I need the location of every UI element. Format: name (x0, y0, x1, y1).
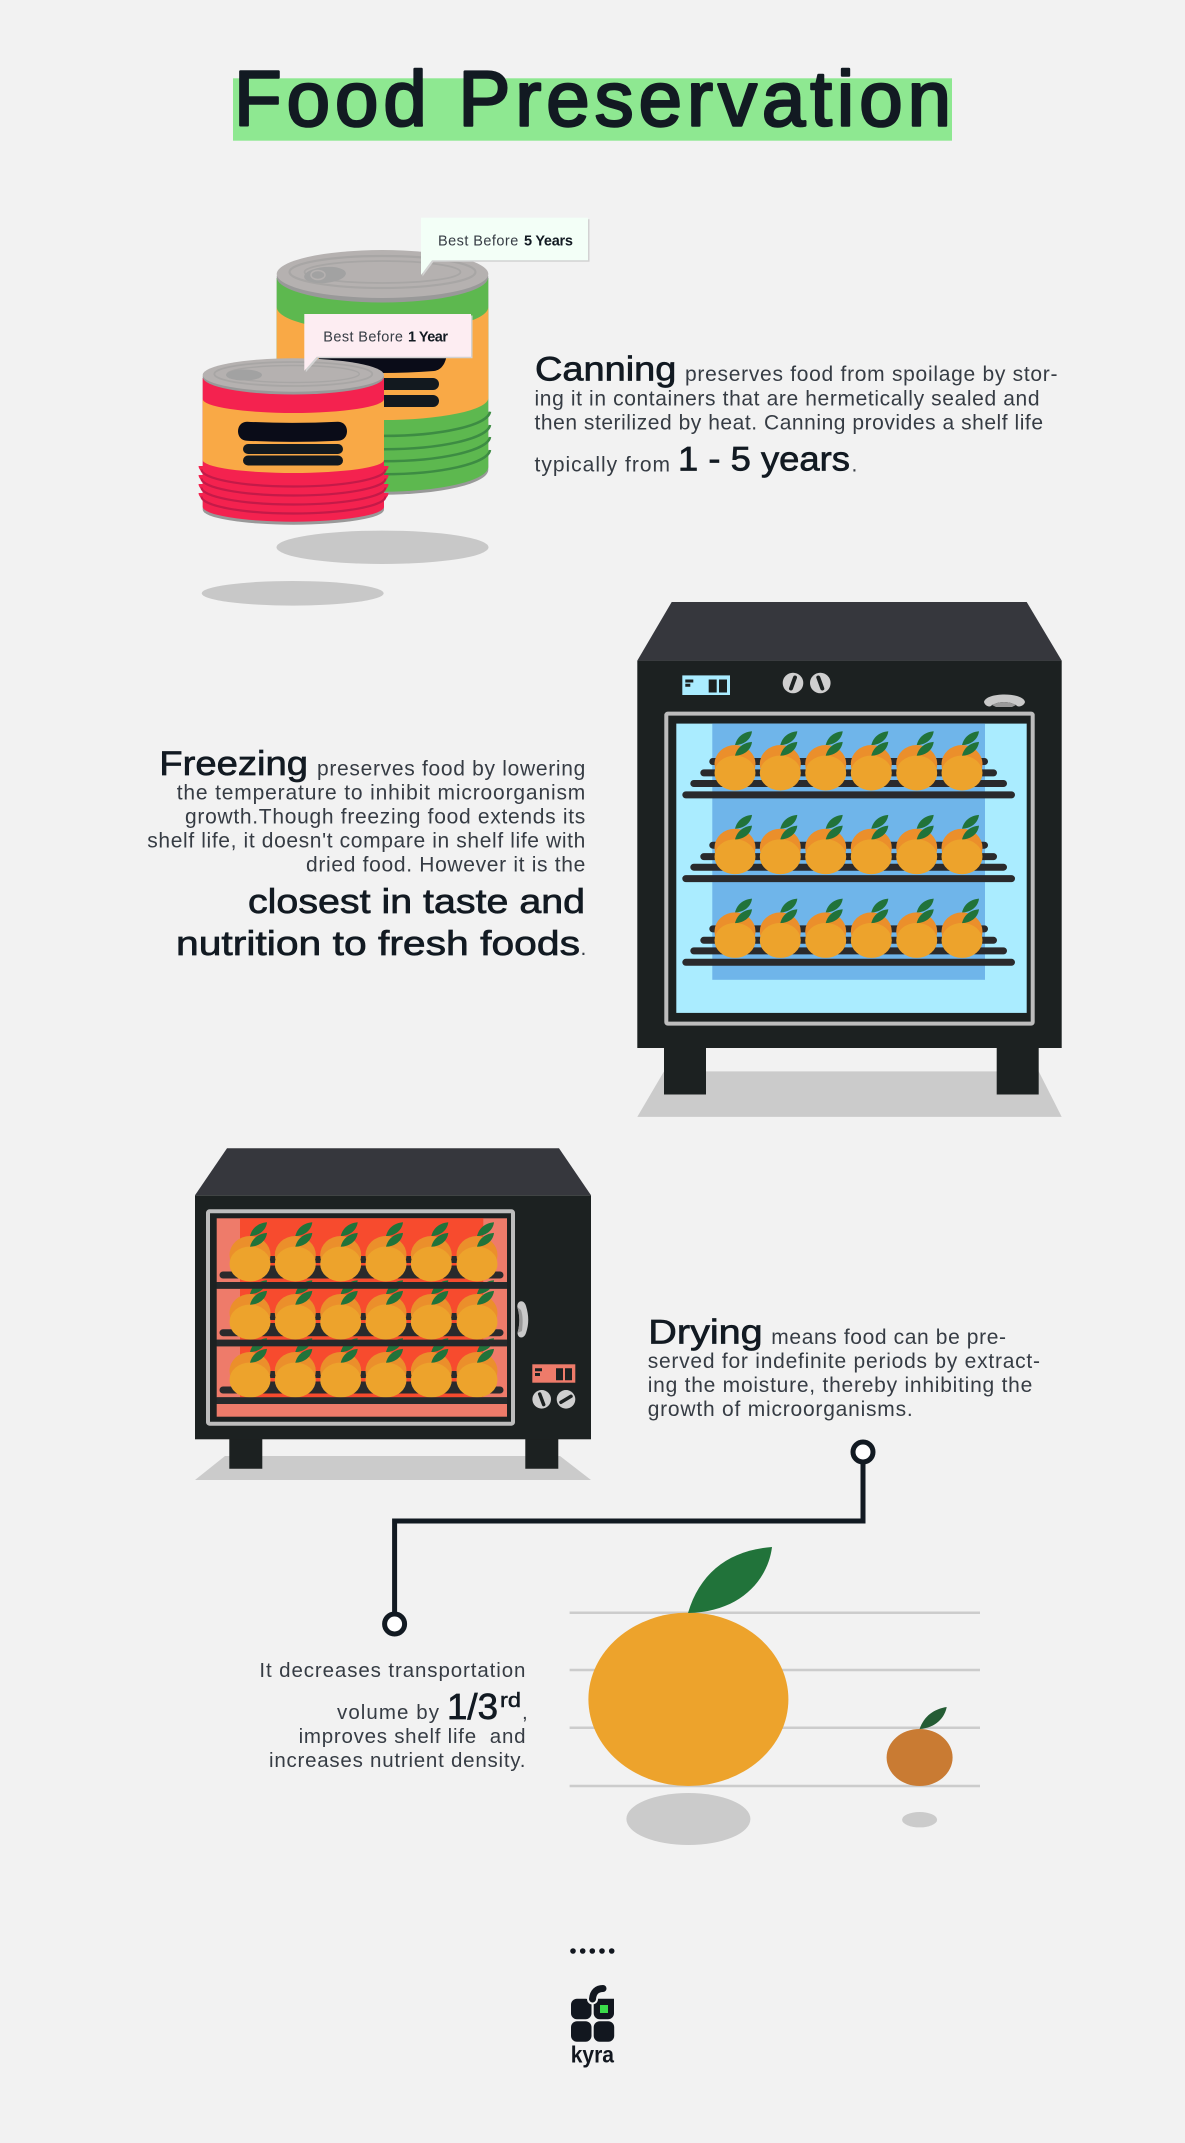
callout: best before 1 year: 1 Year (408, 330, 448, 346)
logo: kyra (571, 1988, 614, 2068)
illustration: orange size comparison (570, 1547, 980, 1845)
shadow: dried orange (902, 1812, 937, 1827)
tray divider bars (217, 1282, 507, 1404)
text block: freezing: the temperature to inhibit microorganism (177, 782, 585, 805)
callout: best before 1 year: Best Before (323, 330, 403, 346)
freezer display panel (682, 675, 730, 695)
dried orange (887, 1707, 953, 1786)
dehydrator knobs (532, 1390, 575, 1409)
dehydrator legs (229, 1436, 558, 1469)
tray 3 (223, 1338, 500, 1398)
highlight: 1/3rd: rd (500, 1689, 521, 1712)
text block: freezing: . (580, 937, 586, 960)
text block: freezing: growth.Though freezing food extends its (185, 806, 585, 829)
illustration: canned food (201, 218, 590, 606)
text block: canning: preserves food from spoilage by stor- (685, 363, 1058, 386)
text block: canning: . (852, 453, 857, 476)
highlight: closest in taste and nutrition: closest in taste and (248, 883, 585, 921)
freezer door (666, 714, 1033, 1024)
freezer legs (664, 1045, 1039, 1094)
highlight: closest in taste and nutrition (176, 883, 585, 963)
text block: freezing: dried food. However it is the (306, 854, 585, 877)
shadow: large can (276, 531, 488, 564)
highlight: 1 - 5 years: 1 - 5 years (678, 441, 850, 479)
text block: freezing: shelf life, it doesn't compare in shelf life with (147, 830, 585, 853)
text block: canning: typically from (534, 453, 670, 476)
text block: freezing: preserves food by lowering (317, 758, 585, 781)
text block: drying (648, 1313, 1040, 1421)
text block: canning: then sterilized by heat. Canning provides a shelf life (534, 412, 1043, 435)
text block: drying: growth of microorganisms. (648, 1398, 913, 1421)
dehydrator display panel (532, 1364, 575, 1383)
freezer knobs (783, 673, 831, 693)
dehydrator body (195, 1195, 591, 1439)
tray 2 (223, 1280, 500, 1340)
text block: drying: means food can be pre- (771, 1326, 1006, 1349)
highlight: 1/3rd (447, 1686, 521, 1727)
dehydrator handle (517, 1301, 528, 1338)
highlight: 1/3rd: 1/3 (447, 1686, 498, 1727)
text block: drying benefits: volume by (337, 1701, 440, 1724)
illustration: freezer (637, 602, 1062, 1117)
text block: drying benefits: increases nutrient density. (269, 1749, 526, 1772)
small red can (201, 358, 386, 525)
callout: best before 5 years: 5 Years (524, 233, 573, 249)
size guide lines (570, 1613, 980, 1786)
logo: kyra: kyra (571, 2042, 614, 2068)
text block: freezing (147, 745, 586, 963)
text block: drying benefits: improves shelf life and (299, 1725, 526, 1748)
callout: best before 5 years: Best Before (438, 233, 518, 249)
illustration: dehydrator (195, 1148, 591, 1480)
callout: best before 5 years (421, 218, 590, 276)
shadow: fresh orange (626, 1793, 750, 1845)
freezer body (637, 661, 1062, 1048)
text block: drying benefits (259, 1659, 528, 1772)
shelf 2 (686, 815, 1012, 879)
heated trays (217, 1218, 507, 1417)
shelf 1 (686, 731, 1012, 795)
dehydrator door (208, 1211, 513, 1424)
footer dots (570, 1948, 614, 1954)
freezer floor shadow (637, 1071, 1062, 1117)
shelf 3 (686, 899, 1012, 962)
connector line (385, 1442, 873, 1634)
heading: freezing: Freezing (159, 745, 308, 783)
text block: drying: served for indefinite periods by extract- (648, 1350, 1040, 1373)
shadow: small can (202, 581, 384, 606)
text block: canning (534, 351, 1058, 479)
text block: drying: ing the moisture, thereby inhibiting the (648, 1374, 1032, 1397)
title: Food Preservation (234, 54, 951, 142)
heading: drying: Drying (648, 1313, 763, 1351)
fresh orange (588, 1547, 788, 1786)
text block: drying benefits: It decreases transportation (259, 1659, 525, 1682)
highlight: closest in taste and nutrition: nutrition to fresh foods (176, 925, 580, 963)
freezer handle (984, 694, 1025, 707)
text block: canning: ing it in containers that are hermetically sealed and (534, 388, 1040, 411)
heading: canning: Canning (535, 351, 676, 389)
callout: best before 1 year (304, 314, 472, 372)
freezer top (637, 602, 1062, 661)
text block: drying benefits: , (522, 1701, 528, 1724)
tray 1 (223, 1222, 500, 1282)
large green can (277, 250, 490, 495)
dehydrator top (195, 1148, 591, 1195)
dehydrator floor shadow (195, 1456, 591, 1480)
